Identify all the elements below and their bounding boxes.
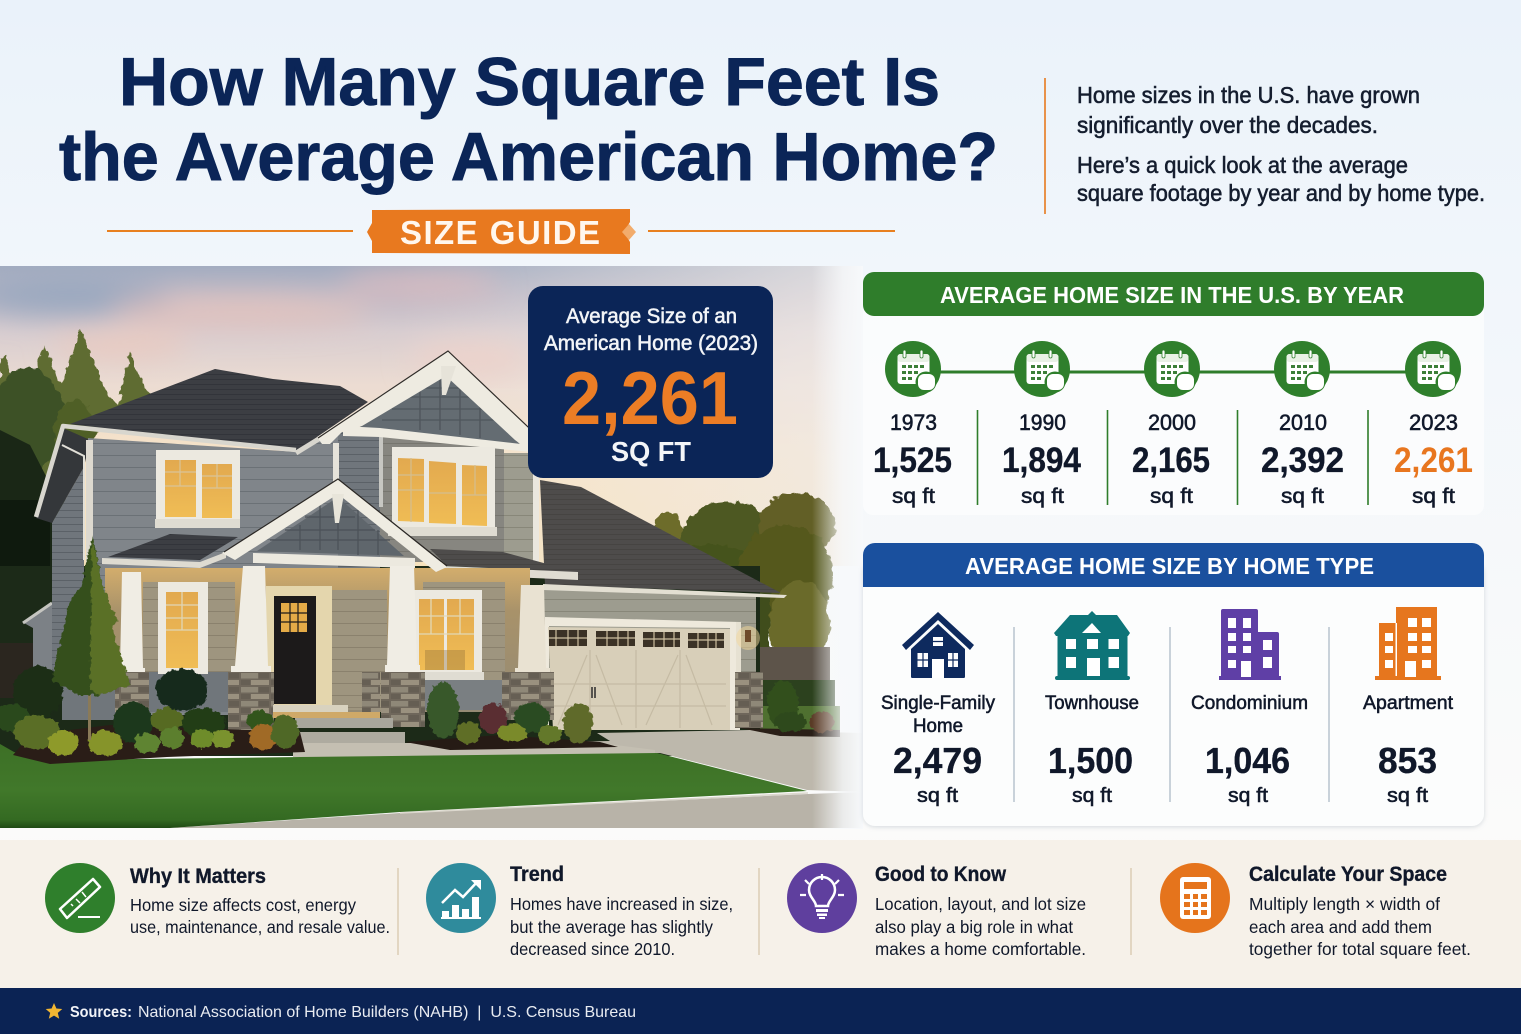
annex left	[0, 603, 52, 698]
title: the Average American Home?	[59, 119, 998, 195]
garage door	[548, 627, 730, 730]
stat: single family: sq ft	[917, 785, 958, 807]
fact: why it matters	[45, 863, 390, 937]
stat: 2000: 2,165	[1132, 441, 1210, 480]
garage wall	[543, 584, 787, 730]
fact: why it matters: use, maintenance, and resale value.	[130, 917, 390, 937]
stat: condominium: sq ft	[1228, 785, 1268, 807]
intro text block: Here’s a quick look at the average	[1077, 152, 1408, 178]
fact: good to know	[787, 863, 1086, 959]
type panel heading: AVERAGE HOME SIZE BY HOME TYPE	[965, 553, 1374, 579]
stat: 1973: 1,525	[873, 441, 952, 480]
icon: growth chart	[426, 863, 496, 933]
stat: 1990	[1002, 410, 1081, 508]
fact: calculate your space: together for total square feet.	[1249, 939, 1471, 959]
panel: average home size by type	[863, 543, 1484, 826]
fact: trend	[426, 863, 733, 959]
main left wall	[36, 428, 340, 715]
title	[59, 44, 998, 195]
driveway and walkway	[170, 730, 862, 828]
right edge fade	[812, 266, 863, 829]
background trees left	[0, 330, 150, 720]
fact: calculate your space: Calculate Your Space	[1249, 863, 1447, 886]
stat: single family: 2,479	[893, 740, 982, 781]
year panel heading: AVERAGE HOME SIZE IN THE U.S. BY YEAR	[940, 282, 1404, 308]
porch steps	[273, 705, 405, 743]
icon: condominium	[1219, 609, 1281, 680]
front door	[266, 586, 332, 708]
stat: 2010: 2010	[1279, 410, 1327, 435]
fact: good to know: Location, layout, and lot size	[875, 894, 1086, 914]
ground base	[0, 566, 760, 756]
background trees right	[654, 493, 835, 670]
stat: 2010: 2,392	[1261, 441, 1344, 480]
stat: 2023: sq ft	[1412, 485, 1455, 508]
stat: 1973: sq ft	[892, 485, 935, 508]
intro text block	[1044, 78, 1485, 214]
intro text block: square footage by year and by home type.	[1077, 180, 1485, 206]
panel: facts strip	[0, 840, 1521, 988]
year panel heading	[863, 272, 1484, 316]
landscaping shrubs	[0, 666, 834, 756]
icon: calculator	[1160, 863, 1230, 933]
stat: townhouse	[1045, 692, 1139, 807]
fact: trend: but the average has slightly	[510, 917, 713, 937]
fact: trend: Homes have increased in size,	[510, 894, 733, 914]
panel: average home size by year	[863, 272, 1484, 515]
icon: lightbulb	[787, 863, 857, 933]
type panel heading	[863, 543, 1484, 587]
stat: apartment: sq ft	[1387, 785, 1428, 807]
sky	[0, 266, 862, 566]
type panel card	[863, 560, 1484, 826]
stat: single family: Home	[913, 715, 963, 737]
stat: condominium: Condominium	[1191, 692, 1308, 714]
icon: calendar 2000	[1144, 341, 1200, 397]
icon: star	[46, 1003, 62, 1019]
small pine tree	[52, 535, 130, 740]
callout: average size 2023: 2,261	[562, 356, 738, 440]
porch left window	[158, 582, 208, 674]
stat: 1973	[873, 410, 952, 508]
icon: calendar 2023	[1405, 341, 1461, 397]
icon: single family house	[902, 612, 974, 678]
lower porch roofs	[102, 534, 578, 580]
stone pier bases	[115, 672, 554, 730]
stat: 2023	[1394, 410, 1473, 508]
porch columns	[118, 566, 550, 674]
stat: 1990: 1990	[1019, 410, 1066, 435]
icon: apartment	[1375, 607, 1441, 680]
fact: calculate your space: Multiply length × width of	[1249, 894, 1440, 914]
stat: condominium: 1,046	[1205, 740, 1290, 781]
footer: sources: National Association of Home Builders (NAHB) | U.S. Census Bureau	[138, 1004, 636, 1021]
timeline line	[913, 370, 1433, 374]
stat: 2023: 2023	[1409, 410, 1458, 435]
main upper roof	[36, 369, 368, 517]
stat: townhouse: Townhouse	[1045, 692, 1139, 714]
callout: average size 2023: American Home (2023)	[544, 332, 758, 355]
fact: trend: decreased since 2010.	[510, 939, 675, 959]
central gable	[317, 351, 567, 472]
stat: 2000	[1132, 410, 1210, 508]
badge: size guide ribbon	[107, 209, 895, 254]
intro text block: Home sizes in the U.S. have grown	[1077, 82, 1420, 108]
fact: why it matters: Home size affects cost, energy	[130, 895, 356, 915]
stat: 2010	[1261, 410, 1344, 508]
stat: 1973: 1973	[890, 410, 937, 435]
wall lantern	[736, 626, 760, 650]
icon: ruler	[45, 863, 115, 933]
house photograph	[0, 266, 863, 829]
upper right window	[388, 447, 497, 536]
icon: calendar 2010	[1274, 341, 1330, 397]
fact: good to know: also play a big role in what	[875, 917, 1073, 937]
porch wall	[62, 568, 530, 720]
porch right window	[410, 590, 484, 680]
year panel background	[863, 300, 1484, 515]
footer: sources	[0, 988, 1521, 1034]
stat: 1990: 1,894	[1002, 441, 1081, 480]
icon: calendar 1973	[885, 341, 941, 397]
stat: apartment	[1363, 692, 1454, 807]
lawn	[0, 744, 807, 828]
fact: calculate your space: each area and add them	[1249, 917, 1432, 937]
badge: size guide ribbon: SIZE GUIDE	[400, 214, 600, 251]
icon: townhouse	[1054, 611, 1130, 680]
stat: single family	[881, 692, 995, 807]
title: How Many Square Feet Is	[119, 44, 940, 120]
footer: sources: Sources:	[70, 1004, 132, 1021]
callout: average size 2023: SQ FT	[611, 436, 691, 467]
stat: 2000: sq ft	[1150, 485, 1193, 508]
stat: single family: Single-Family	[881, 692, 995, 714]
stat: townhouse: sq ft	[1072, 785, 1112, 807]
fact: calculate your space	[1160, 863, 1471, 959]
stat: apartment: 853	[1378, 740, 1437, 781]
upper left window	[155, 450, 240, 528]
fence and right yard	[758, 647, 840, 734]
stat: 2010: sq ft	[1281, 485, 1324, 508]
garage stone pier	[735, 672, 763, 728]
stat: 2023: 2,261	[1394, 441, 1473, 480]
intro text block: significantly over the decades.	[1077, 112, 1378, 138]
fact: why it matters: Why It Matters	[130, 865, 266, 888]
fact: good to know: Good to Know	[875, 863, 1007, 886]
central section wall	[333, 432, 539, 572]
porch gable	[222, 479, 447, 572]
garage roof	[540, 480, 781, 593]
stat: condominium	[1191, 692, 1308, 807]
fact: trend: Trend	[510, 863, 564, 886]
mulch beds	[13, 725, 840, 764]
stat: 1990: sq ft	[1021, 485, 1064, 508]
stat: townhouse: 1,500	[1048, 740, 1133, 781]
fact: good to know: makes a home comfortable.	[875, 939, 1086, 959]
callout: average size 2023	[528, 286, 773, 478]
icon: calendar 1990	[1014, 341, 1070, 397]
stat: 2000: 2000	[1148, 410, 1196, 435]
stat: apartment: Apartment	[1363, 692, 1454, 714]
callout: average size 2023: Average Size of an	[566, 305, 737, 328]
